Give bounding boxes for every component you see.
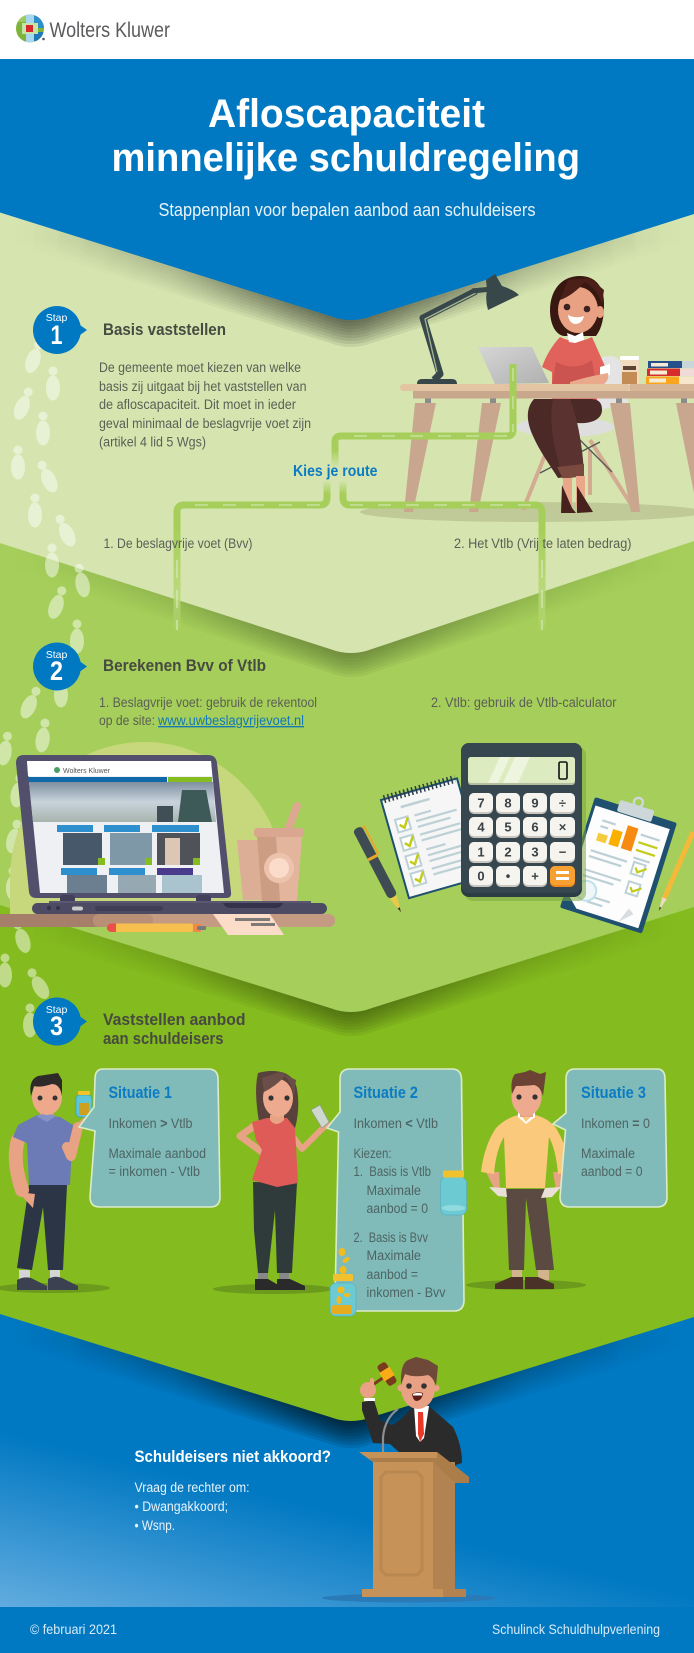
calculator: 4 [477, 820, 485, 834]
person: man with empty pockets [466, 1070, 586, 1290]
text block: • Wsnp. [134, 1518, 175, 1533]
step 3 badge: 3 [50, 1011, 63, 1041]
calculator: ÷ [559, 796, 566, 810]
panel: step 2 berekenen [0, 642, 694, 935]
step 2 badge: Stap [46, 649, 67, 661]
callout: situatie 1: Inkomen > Vtlb [108, 1116, 192, 1131]
callout: situatie 2: Kiezen: [354, 1146, 392, 1161]
callout: situatie 2: Maximale [366, 1248, 421, 1263]
title block: minnelijke schuldregeling [112, 136, 580, 180]
body text: de afloscapaciteit. Dit moet in ieder [99, 397, 296, 412]
route roads [177, 364, 542, 632]
note paper [213, 914, 284, 935]
mid green chevron band [0, 59, 694, 1036]
front cup [254, 806, 304, 901]
callout: situatie 1: Situatie 1 [108, 1084, 172, 1102]
heading: aan schuldeisers [103, 1029, 224, 1048]
text block [134, 1447, 331, 1533]
calculator: + [531, 868, 539, 884]
body text: (artikel 4 lid 5 Wgs) [99, 434, 206, 450]
callout: situatie 2: 1. Basis is Vtlb [354, 1164, 431, 1179]
person: woman with banknote [213, 1071, 333, 1294]
panel: step 3 vaststellen aanbod [0, 998, 667, 1316]
pencil [107, 924, 206, 932]
icon: desk lamp [417, 274, 519, 384]
callout: situatie 2: aanbod = [366, 1267, 418, 1282]
callout: situatie 2: 2. Basis is Bvv [354, 1230, 428, 1245]
body text: basis zij uitgaat bij het vaststellen van [99, 379, 306, 394]
route label: kies je route: Kies je route [293, 463, 378, 480]
callout: situatie 3: Inkomen = 0 [581, 1116, 650, 1131]
footer bar [0, 1607, 694, 1653]
callout: situatie 2: Inkomen < Vtlb [354, 1116, 438, 1131]
icon: banknote [311, 1105, 329, 1128]
step 3 badge [33, 998, 87, 1046]
laptop screen: Wolters Kluwer [63, 768, 111, 775]
text block: • Dwangakkoord; [134, 1499, 228, 1514]
callout: situatie 2 [327, 1069, 464, 1311]
text block: Schuldeisers niet akkoord? [134, 1447, 331, 1466]
footprints trail [0, 338, 92, 1038]
callout: situatie 1: = inkomen - Vtlb [108, 1164, 200, 1179]
icon: empty jar [440, 1170, 466, 1215]
callout: situatie 3: aanbod = 0 [581, 1164, 642, 1179]
step 1 badge: 1 [50, 320, 62, 350]
calculator: − [559, 844, 567, 860]
icon: stacked binders [646, 361, 694, 384]
callout: situatie 2: Maximale [366, 1183, 421, 1198]
pen [353, 825, 407, 915]
calculator: 1 [477, 844, 485, 860]
body text [99, 360, 311, 450]
step 3 badge: Stap [46, 1004, 67, 1016]
title block [112, 92, 580, 220]
callout: situatie 2: inkomen - Bvv [366, 1285, 446, 1300]
light green chevron band [0, 59, 694, 677]
panel: step 1 basis vaststellen [33, 274, 694, 632]
clipboard [560, 785, 681, 934]
calculator: 0 [477, 868, 485, 884]
calculator: 9 [531, 796, 539, 810]
person: man with coin jar [0, 1073, 110, 1293]
callout: situatie 2: Situatie 2 [354, 1084, 418, 1102]
title block: Afloscapaciteit [208, 92, 485, 136]
notepad [381, 778, 485, 898]
option text 1: op de site: [99, 713, 155, 728]
option text 1: 1. Beslagvrije voet: gebruik de rekentool [99, 695, 317, 710]
back cup [237, 840, 262, 900]
illustration: calculator, notepad, clipboard, pens [353, 743, 694, 934]
icon: jar with falling coins [330, 1248, 356, 1316]
route option 2: 2. Het Vtlb (Vrij te laten bedrag) [454, 536, 632, 551]
icon: jar with coins [76, 1091, 92, 1117]
calculator: 5 [504, 820, 512, 834]
callout: situatie 2: aanbod = 0 [366, 1201, 428, 1216]
body text: geval minimaal de beslagvrije voet zijn [99, 416, 311, 431]
option text 1: www.uwbeslagvrijevoet.nl [157, 713, 304, 728]
calculator: × [559, 820, 567, 834]
icon: gavel [374, 1361, 398, 1387]
step 1 badge [33, 306, 87, 354]
callout: situatie 3: Maximale [581, 1146, 635, 1161]
illustration: judge at podium with gavel [322, 1357, 496, 1602]
footer source: Schulinck Schuldhulpverlening [492, 1622, 660, 1637]
callout: situatie 1 [79, 1069, 220, 1207]
callout: situatie 3: Situatie 3 [581, 1084, 646, 1102]
calculator: 8 [504, 796, 512, 810]
step 2 badge [33, 642, 87, 690]
calculator: • [506, 868, 511, 884]
panel: schuldeisers niet akkoord [134, 1357, 496, 1602]
heading [103, 1010, 246, 1048]
heading: Basis vaststellen [103, 320, 226, 339]
table [0, 914, 335, 927]
icon: Wolters Kluwer mosaic logo [16, 14, 45, 43]
body text: De gemeente moet kiezen van welke [99, 360, 301, 375]
blue header chevron [0, 59, 694, 347]
heading: Vaststellen aanbod [103, 1010, 246, 1029]
calculator: 6 [531, 820, 539, 834]
option text 2: 2. Vtlb: gebruik de Vtlb-calculator [431, 695, 617, 710]
calculator [461, 743, 586, 901]
laptop base [32, 895, 327, 914]
text block: Vraag de rechter om: [134, 1480, 250, 1495]
logo wordmark: Wolters Kluwer [50, 19, 170, 42]
calculator: 3 [531, 844, 539, 860]
step 1 badge: Stap [46, 312, 67, 324]
illustration: laptop on table with cups [0, 742, 335, 935]
laptop screen [16, 755, 231, 898]
illustration: woman at desk with lamp and laptop [360, 274, 694, 522]
callout: situatie 1: Maximale aanbod [108, 1146, 206, 1161]
heading: Berekenen Bvv of Vtlb [103, 656, 266, 675]
logo header bar [16, 14, 170, 42]
icon: coffee cup [620, 356, 639, 384]
calculator: 2 [504, 844, 512, 860]
calculator: 7 [477, 796, 485, 810]
step 2 badge: 2 [50, 656, 63, 686]
yellow pencil [657, 831, 694, 912]
option text 1 [99, 695, 317, 728]
callout: situatie 3 [553, 1069, 667, 1207]
route option 1: 1. De beslagvrije voet (Bvv) [104, 536, 252, 551]
title block: Stappenplan voor bepalen aanbod aan schuldeisers [158, 200, 536, 220]
footer date: © februari 2021 [30, 1622, 117, 1637]
